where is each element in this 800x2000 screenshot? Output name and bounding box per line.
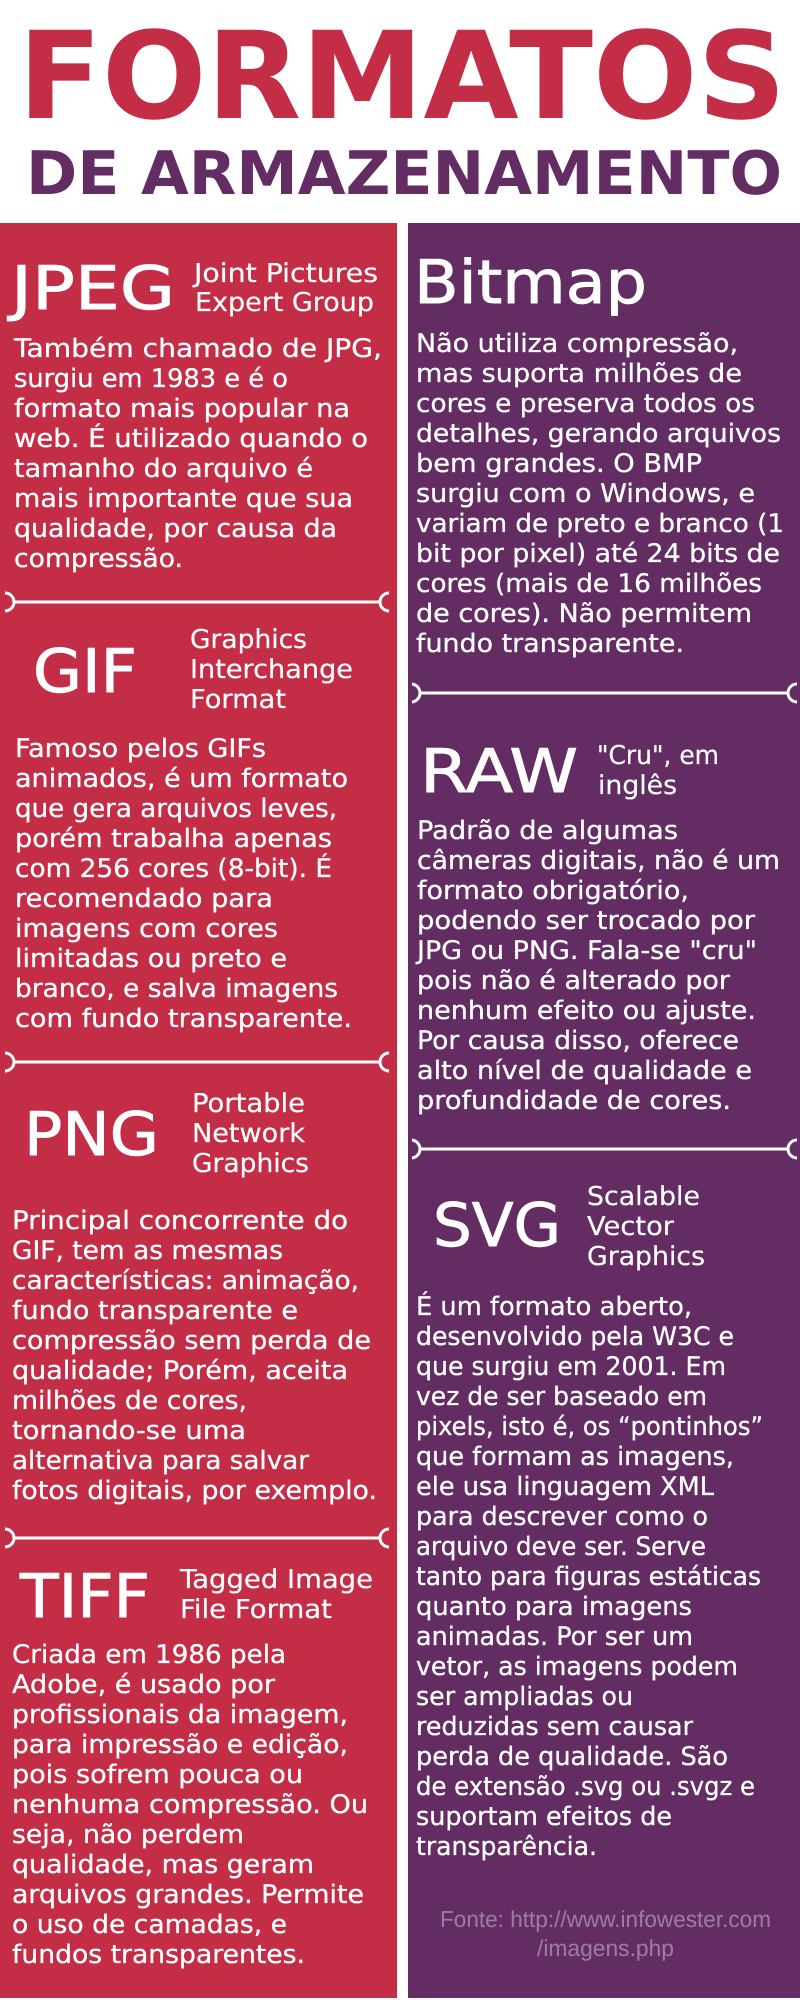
text block: GIF: com fundo transparente. (15, 1004, 352, 1034)
subtitle: PNG: Network (192, 1119, 305, 1149)
text block: SVG: reduzidas sem causar (416, 1712, 694, 1742)
text block: TIFF: Criada em 1986 pela (12, 1640, 286, 1670)
text block: SVG: ser ampliadas ou (416, 1682, 633, 1712)
text block: GIF (15, 734, 352, 1034)
text block: PNG: características: animação, (12, 1266, 359, 1296)
subtitle: GIF (190, 625, 353, 715)
text block: GIF: com 256 cores (8-bit). É (15, 853, 332, 884)
text block: JPEG: mais importante que sua (14, 484, 353, 514)
subtitle: RAW: "Cru", em (597, 741, 719, 771)
heading: SVG: SVG (433, 1191, 561, 1261)
subtitle: JPEG: Joint Pictures (192, 259, 378, 289)
title (18, 6, 786, 209)
subtitle: GIF: Format (190, 685, 286, 715)
text block: JPEG: web. É utilizado quando o (14, 423, 368, 454)
text block: TIFF: fundos transparentes. (12, 1940, 305, 1970)
text block: Bitmap: mas suporta milhões de (416, 359, 742, 389)
subtitle: GIF: Interchange (190, 655, 353, 685)
text block: RAW: nenhum efeito ou ajuste. (417, 996, 756, 1026)
subtitle: SVG: Vector (587, 1212, 674, 1242)
text block: SVG: ele usa linguagem XML (416, 1472, 715, 1502)
subtitle: RAW (597, 741, 719, 801)
section: SVG (416, 1182, 763, 1862)
text block: PNG: alternativa para salvar (12, 1446, 310, 1476)
text block: RAW: pois não é alterado por (417, 966, 731, 996)
text block: Bitmap: fundo transparente. (416, 629, 684, 659)
heading: TIFF: TIFF (19, 1562, 150, 1632)
text block: JPEG: formato mais popular na (14, 394, 350, 424)
text block: JPEG: tamanho do arquivo é (14, 454, 313, 484)
text block: GIF: limitadas ou preto e (15, 944, 287, 974)
source note (440, 1906, 771, 1961)
text block: PNG: compressão sem perda de (12, 1326, 371, 1356)
subtitle: SVG: Scalable (587, 1182, 700, 1212)
text block: JPEG (13, 334, 382, 574)
text block: GIF: que gera arquivos leves, (15, 794, 337, 824)
text block: Bitmap: surgiu com o Windows, e (416, 479, 755, 509)
text block: TIFF: o uso de camadas, e (12, 1910, 287, 1940)
source note: /imagens.php (537, 1935, 674, 1961)
text block: TIFF: qualidade, mas geram (12, 1850, 314, 1880)
text block: TIFF: profissionais da imagem, (12, 1700, 348, 1730)
text block: SVG: perda de qualidade. São (416, 1742, 728, 1772)
text block: SVG (416, 1291, 763, 1862)
subtitle: SVG: Graphics (587, 1242, 705, 1272)
text block: JPEG: surgiu em 1983 e é o (14, 364, 288, 394)
text block: PNG: qualidade; Porém, aceita (12, 1356, 348, 1386)
text block: SVG: arquivo deve ser. Serve (416, 1532, 706, 1562)
heading: JPEG: JPEG (6, 254, 175, 324)
text block: JPEG: qualidade, por causa da (14, 514, 337, 544)
heading: GIF: GIF (33, 637, 137, 707)
text block: TIFF: pois sofrem pouca ou (12, 1760, 303, 1790)
text block: RAW: podendo ser trocado por (417, 906, 756, 936)
panel: right column (408, 223, 800, 1998)
subtitle: TIFF: File Format (180, 1595, 332, 1625)
text block: TIFF: Adobe, é usado por (12, 1670, 276, 1700)
subtitle: TIFF: Tagged Image (179, 1565, 373, 1595)
text block: Bitmap: cores e preserva todos os (416, 389, 755, 419)
heading: DE ARMAZENAMENTO: DE ARMAZENAMENTO (26, 139, 782, 209)
text block: PNG: fundo transparente e (12, 1296, 298, 1326)
subtitle: PNG: Graphics (192, 1149, 309, 1179)
text block: RAW: JPG ou PNG. Fala-se "cru" (415, 936, 757, 966)
subtitle: TIFF (179, 1565, 373, 1625)
section: TIFF (12, 1562, 373, 1970)
section: JPEG (6, 254, 382, 574)
text block: RAW: profundidade de cores. (417, 1086, 731, 1116)
heading: PNG: PNG (24, 1100, 159, 1170)
heading: FORMATOS: FORMATOS (18, 6, 786, 147)
text block: SVG: tanto para figuras estáticas (416, 1562, 761, 1592)
subtitle: JPEG (192, 259, 378, 318)
text block: Bitmap: Não utiliza compressão, (416, 329, 738, 359)
text block: Bitmap: bem grandes. O BMP (416, 449, 702, 479)
subtitle: RAW: inglês (598, 771, 677, 801)
text block: GIF: recomendado para (15, 884, 273, 914)
text block: SVG: É um formato aberto, (416, 1291, 692, 1322)
text block: GIF: imagens com cores (15, 914, 278, 944)
panel: left column (0, 223, 397, 1998)
text block: Bitmap: de cores). Não permitem (416, 599, 752, 629)
subtitle: GIF: Graphics (190, 625, 307, 655)
text block: RAW (415, 816, 780, 1116)
text block: SVG: que surgiu em 2001. Em (416, 1352, 726, 1382)
text block: TIFF (12, 1640, 368, 1970)
subtitle: SVG (587, 1182, 705, 1272)
text block: GIF: Famoso pelos GIFs (15, 734, 266, 764)
text block: PNG: fotos digitais, por exemplo. (12, 1476, 377, 1506)
section: PNG (12, 1089, 377, 1506)
text block: SVG: desenvolvido pela W3C e (416, 1322, 734, 1352)
text block: PNG: Principal concorrente do (12, 1206, 348, 1236)
text block: SVG: vetor, as imagens podem (416, 1652, 738, 1682)
subtitle: JPEG: Expert Group (195, 288, 374, 318)
text block: SVG: que formam as imagens, (416, 1442, 734, 1472)
heading: RAW: RAW (420, 737, 578, 807)
text block: PNG: tornando-se uma (12, 1416, 246, 1446)
text block: SVG: para descrever como o (416, 1502, 708, 1532)
text block: Bitmap: variam de preto e branco (1 (416, 509, 784, 539)
subtitle: PNG (192, 1089, 309, 1179)
text block: RAW: Padrão de algumas (417, 816, 678, 846)
text block: TIFF: nenhuma compressão. Ou (12, 1790, 368, 1820)
text block: SVG: animadas. Por ser um (416, 1622, 693, 1652)
subtitle: PNG: Portable (192, 1089, 305, 1119)
text block: SVG: de extensão .svg ou .svgz e (416, 1772, 755, 1802)
section: RAW (415, 737, 780, 1116)
text block: SVG: vez de ser baseado em (416, 1382, 707, 1412)
text block: PNG: GIF, tem as mesmas (12, 1236, 283, 1266)
text block: SVG: transparência. (416, 1832, 597, 1862)
source note: Fonte: http://www.infowester.com (440, 1906, 771, 1932)
text block: TIFF: para impressão e edição, (12, 1730, 348, 1760)
heading: Bitmap: Bitmap (414, 248, 647, 318)
text block: TIFF: seja, não perdem (12, 1820, 244, 1850)
text block: SVG: suportam efeitos de (416, 1802, 672, 1832)
text block: Bitmap (416, 329, 784, 659)
text block: PNG: milhões de cores, (12, 1386, 247, 1416)
text block: GIF: branco, e salva imagens (15, 974, 338, 1004)
text block: Bitmap: cores (mais de 16 milhões (416, 569, 762, 599)
text block: TIFF: arquivos grandes. Permite (12, 1880, 364, 1910)
section: Bitmap (414, 248, 784, 659)
text block: RAW: formato obrigatório, (417, 876, 689, 906)
text block: Bitmap: bit por pixel) até 24 bits de (416, 539, 780, 569)
text block: RAW: Por causa disso, oferece (417, 1026, 739, 1056)
section: GIF (15, 625, 353, 1034)
text block: GIF: porém trabalha apenas (15, 824, 332, 854)
text block: JPEG: Também chamado de JPG, (13, 334, 382, 364)
text block: Bitmap: detalhes, gerando arquivos (416, 419, 781, 449)
text block: PNG (12, 1206, 377, 1506)
text block: GIF: animados, é um formato (15, 764, 348, 794)
text block: SVG: quanto para imagens (416, 1592, 692, 1622)
text block: JPEG: compressão. (14, 544, 183, 574)
text block: RAW: câmeras digitais, não é um (417, 846, 780, 876)
text block: RAW: alto nível de qualidade e (417, 1056, 752, 1086)
text block: SVG: pixels, isto é, os “pontinhos” (416, 1412, 763, 1442)
